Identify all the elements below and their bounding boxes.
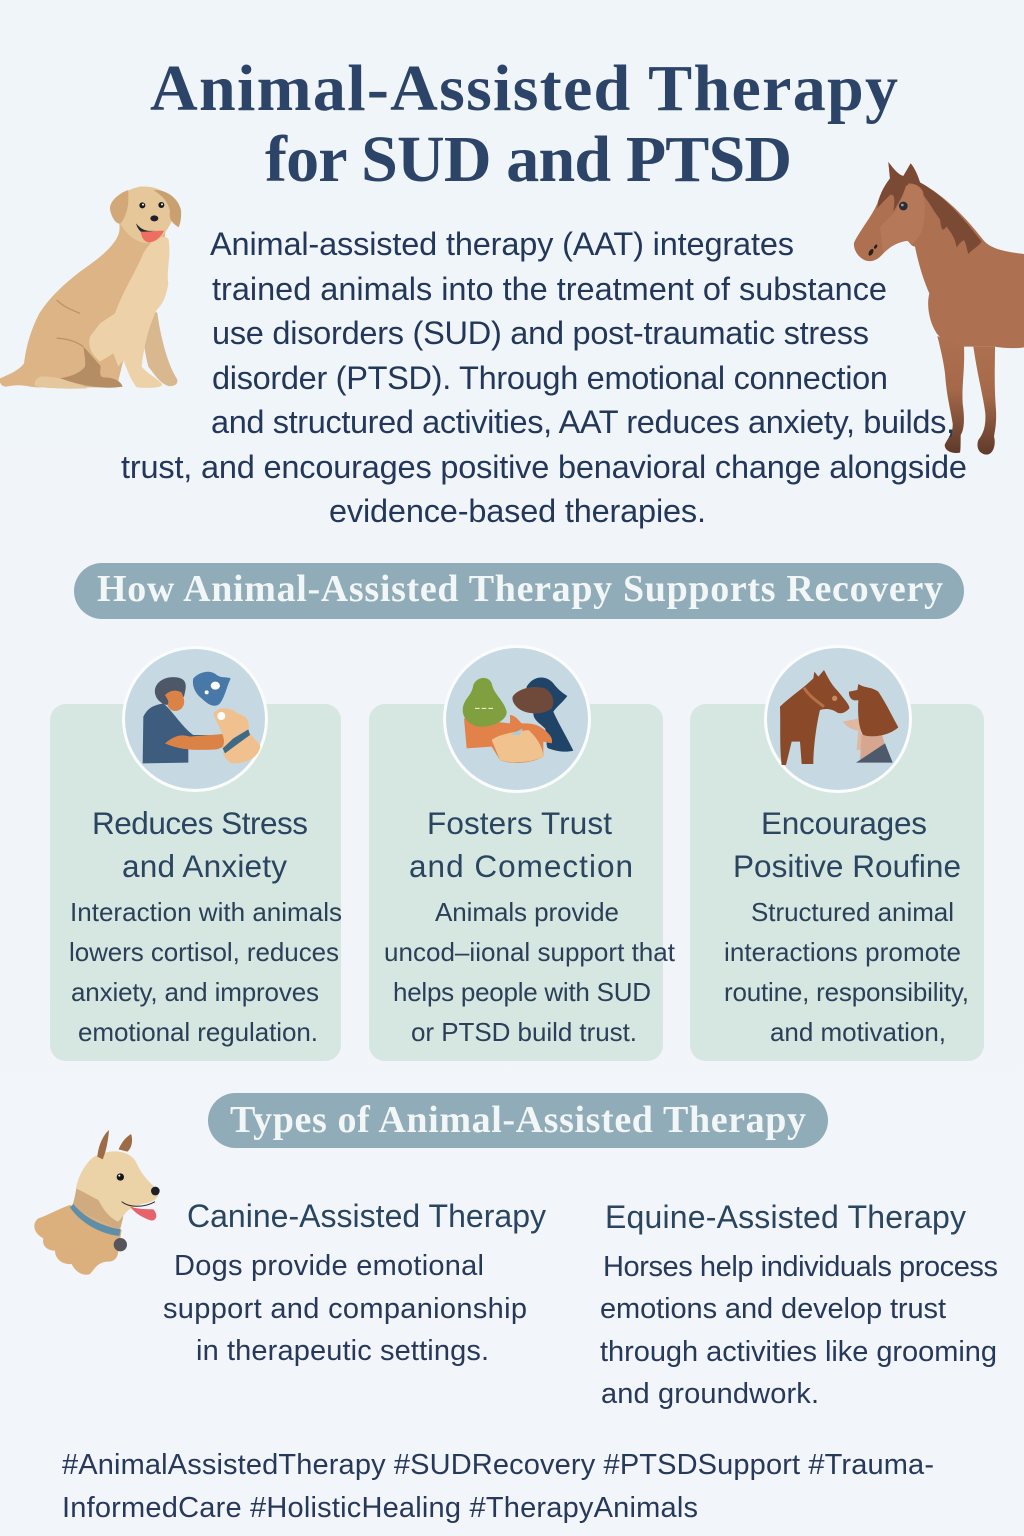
hashtags: InformedCare #HolisticHealing #TherapyAnimals [62,1492,698,1524]
card heading: and Comection [409,848,633,884]
text block: equine-assisted therapy: Horses help individuals process [603,1251,998,1283]
card heading: and Anxiety [122,848,287,884]
section banner: how AAT supports recovery: How Animal-Assisted Therapy Supports Recovery [97,568,943,610]
panel: fosters trust and connection [369,645,676,1061]
title: for SUD and PTSD [265,123,792,196]
heading: equine-assisted therapy: Equine-Assisted Therapy [605,1199,966,1235]
intro paragraph: and structured activities, AAT reduces anxiety, builds, [211,404,955,440]
card heading [409,805,633,884]
text block: canine-assisted therapy: Dogs provide emotional [174,1250,484,1282]
card text: lowers cortisol, reduces [69,937,339,967]
card text: interactions promote [724,937,961,967]
card text: and motivation, [770,1017,946,1047]
title [150,52,898,196]
card text [724,897,969,1047]
card text: helps people with SUD [393,977,651,1007]
card heading: Encourages [761,805,927,841]
card text: uncod–iional support that [384,937,676,967]
icon: brown horse [854,162,1024,455]
icon: small dog with collar [34,1130,160,1275]
intro paragraph [121,226,967,529]
intro paragraph: Animal-assisted therapy (AAT) integrates [210,226,794,262]
intro paragraph: use disorders (SUD) and post-traumatic stress [212,315,869,351]
text block: equine-assisted therapy: emotions and develop trust [600,1293,946,1325]
intro paragraph: evidence-based therapies. [329,493,706,529]
intro paragraph: disorder (PTSD). Through emotional connection [212,360,888,396]
card text [69,897,342,1047]
card text: Structured animal [751,897,954,927]
text block: canine-assisted therapy: support and companionship [163,1293,527,1325]
card heading [92,805,308,884]
icon: golden retriever sitting [0,186,181,389]
text block: equine-assisted therapy: and groundwork. [601,1378,819,1410]
icon: horse and person face to face [764,645,912,793]
card heading: Reduces Stress [92,805,308,841]
intro paragraph: trained animals into the treatment of substance [212,271,887,307]
intro paragraph: trust, and encourages positive benavioral change alongside [121,449,967,485]
heading: canine-assisted therapy: Canine-Assisted Therapy [187,1198,546,1234]
text block: equine-assisted therapy [600,1251,998,1410]
card text: routine, responsibility, [724,977,969,1007]
title: Animal-Assisted Therapy [150,52,898,125]
text block: equine-assisted therapy: through activities like grooming [600,1336,997,1368]
card text [384,897,676,1047]
text block: canine-assisted therapy [163,1250,527,1367]
icon: person petting a dog [122,646,268,792]
card text: Interaction with animals [70,897,342,927]
hashtags: #AnimalAssistedTherapy #SUDRecovery #PTSDSupport #Trauma- [62,1449,934,1481]
icon: people and animal together [443,645,591,793]
hashtags [62,1449,934,1524]
panel: reduces stress and anxiety [50,646,342,1061]
card heading: Fosters Trust [427,805,612,841]
card text: Animals provide [435,897,619,927]
card heading: Positive Roufine [733,848,961,884]
panel: encourages positive routine [690,645,984,1061]
card heading [733,805,961,884]
text block: canine-assisted therapy: in therapeutic settings. [196,1335,489,1367]
card text: or PTSD build trust. [411,1017,637,1047]
card text: anxiety, and improves [71,977,319,1007]
section banner: types of AAT: Types of Animal-Assisted Therapy [230,1099,806,1141]
card text: emotional regulation. [78,1017,318,1047]
